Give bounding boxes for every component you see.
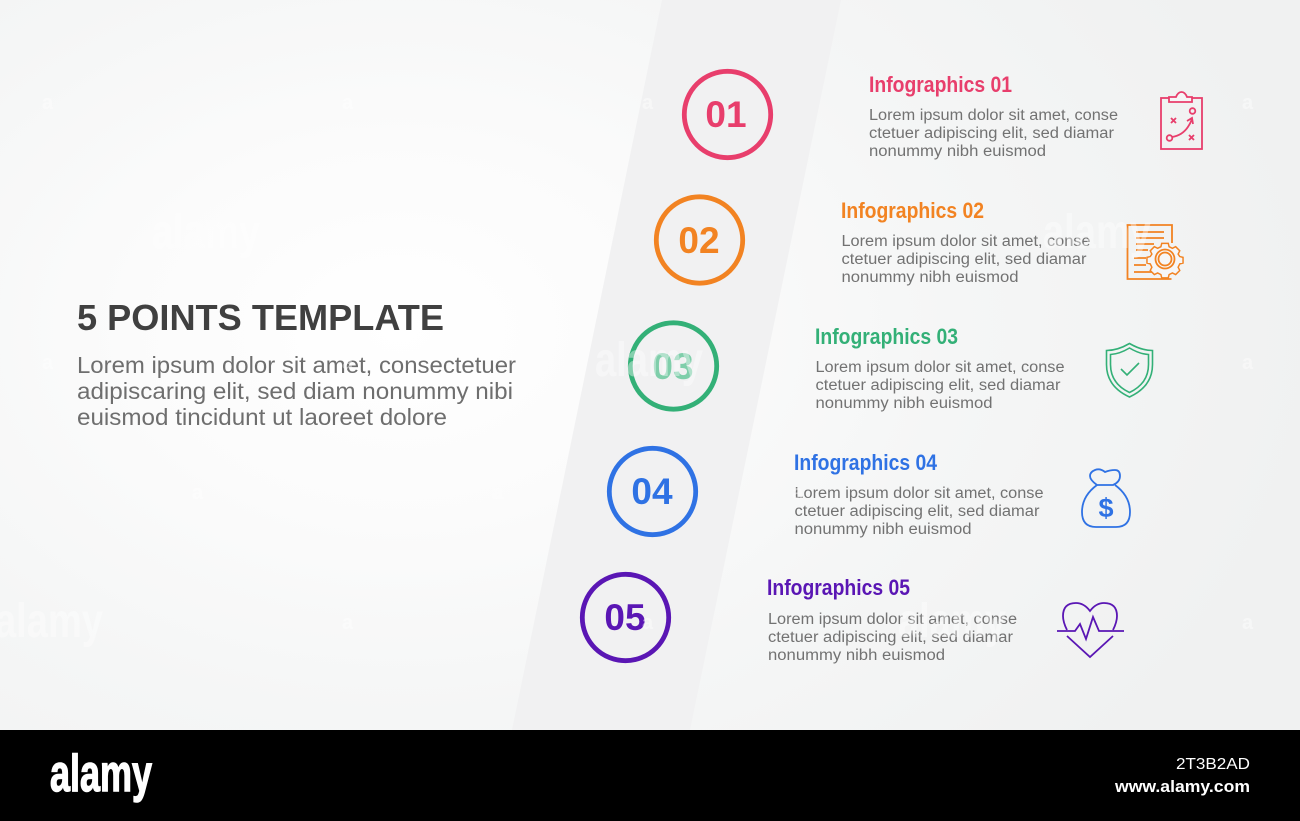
intro text block: Lorem ipsum dolor sit amet, consectetuer bbox=[77, 352, 516, 378]
description 05 bbox=[768, 611, 1017, 664]
footer url: www.alamy.com bbox=[1114, 777, 1250, 796]
number badge 01 bbox=[684, 71, 771, 158]
heading 03: Infographics 03 bbox=[815, 324, 958, 349]
description 03: ctetuer adipiscing elit, sed diamar bbox=[816, 377, 1060, 394]
image id: 2T3B2AD bbox=[1176, 756, 1250, 773]
description 03: nonummy nibh euismod bbox=[816, 395, 992, 412]
description 03 bbox=[816, 359, 1064, 412]
icon: heartbeat bbox=[1057, 603, 1124, 657]
number badge 05: 05 bbox=[604, 597, 646, 638]
description 02: Lorem ipsum dolor sit amet, conse bbox=[842, 233, 1090, 250]
point 03 bbox=[630, 323, 1152, 412]
description 04: ctetuer adipiscing elit, sed diamar bbox=[794, 503, 1040, 520]
footer bar bbox=[0, 730, 1300, 821]
description 02: ctetuer adipiscing elit, sed diamar bbox=[842, 251, 1086, 268]
number badge 04: 04 bbox=[631, 471, 673, 512]
watermarks: a bbox=[1242, 92, 1254, 114]
point 01 bbox=[684, 71, 1202, 160]
icon: money bag bbox=[1082, 469, 1130, 527]
title: 5 POINTS TEMPLATE bbox=[77, 297, 444, 338]
watermarks: a bbox=[1242, 352, 1254, 374]
icon: money bag: $ bbox=[1098, 493, 1114, 523]
description 01: Lorem ipsum dolor sit amet, conse bbox=[869, 107, 1118, 124]
watermarks: a bbox=[1242, 612, 1254, 634]
description 02 bbox=[842, 233, 1090, 286]
watermarks: alamy bbox=[1043, 206, 1151, 259]
number badge 03: 03 bbox=[652, 346, 694, 387]
watermarks: alamy bbox=[595, 334, 703, 387]
number badge 01: 01 bbox=[705, 94, 747, 135]
heading 04: Infographics 04 bbox=[794, 450, 938, 475]
point 02 bbox=[656, 197, 1183, 286]
number badge 05 bbox=[582, 574, 669, 661]
description 04: Lorem ipsum dolor sit amet, conse bbox=[794, 485, 1044, 502]
watermarks: a bbox=[642, 612, 654, 634]
watermarks: alamy bbox=[152, 206, 260, 259]
watermarks: a bbox=[342, 352, 354, 374]
number badge 02: 02 bbox=[678, 220, 720, 261]
description 05: Lorem ipsum dolor sit amet, conse bbox=[768, 611, 1017, 628]
slanted band bbox=[512, 0, 841, 730]
description 05: nonummy nibh euismod bbox=[768, 647, 945, 664]
description 02: nonummy nibh euismod bbox=[842, 269, 1018, 286]
watermarks: a bbox=[642, 92, 654, 114]
description 01: nonummy nibh euismod bbox=[869, 143, 1046, 160]
watermarks: alamy bbox=[898, 595, 1006, 648]
intro text block bbox=[77, 352, 516, 430]
heading 02: Infographics 02 bbox=[841, 198, 984, 223]
watermarks: a bbox=[792, 482, 804, 504]
watermarks: a bbox=[342, 612, 354, 634]
watermarks bbox=[0, 92, 1254, 648]
watermarks: a bbox=[342, 92, 354, 114]
watermarks: a bbox=[492, 482, 504, 504]
icon: document with gear bbox=[1128, 225, 1183, 279]
number badge 03 bbox=[630, 323, 717, 409]
watermarks: a bbox=[192, 482, 204, 504]
heading 05: Infographics 05 bbox=[767, 575, 910, 600]
description 03: Lorem ipsum dolor sit amet, conse bbox=[816, 359, 1064, 376]
number badge 04 bbox=[609, 448, 696, 535]
watermarks: a bbox=[42, 92, 54, 114]
footer logo: alamy bbox=[50, 745, 152, 803]
description 04 bbox=[794, 485, 1044, 538]
point 04 bbox=[609, 448, 1130, 538]
point 05 bbox=[582, 574, 1124, 664]
description 05: ctetuer adipiscing elit, sed diamar bbox=[768, 629, 1013, 646]
number badge 02 bbox=[656, 197, 743, 283]
heading 01: Infographics 01 bbox=[869, 72, 1012, 97]
intro text block: euismod tincidunt ut laoreet dolore bbox=[77, 404, 447, 430]
watermarks: a bbox=[42, 352, 54, 374]
intro text block: adipiscaring elit, sed diam nonummy nibi bbox=[77, 378, 513, 404]
description 04: nonummy nibh euismod bbox=[794, 521, 972, 538]
description 01 bbox=[869, 107, 1118, 160]
description 01: ctetuer adipiscing elit, sed diamar bbox=[869, 125, 1114, 142]
icon: clipboard strategy bbox=[1161, 92, 1202, 149]
icon: shield check bbox=[1106, 344, 1152, 397]
